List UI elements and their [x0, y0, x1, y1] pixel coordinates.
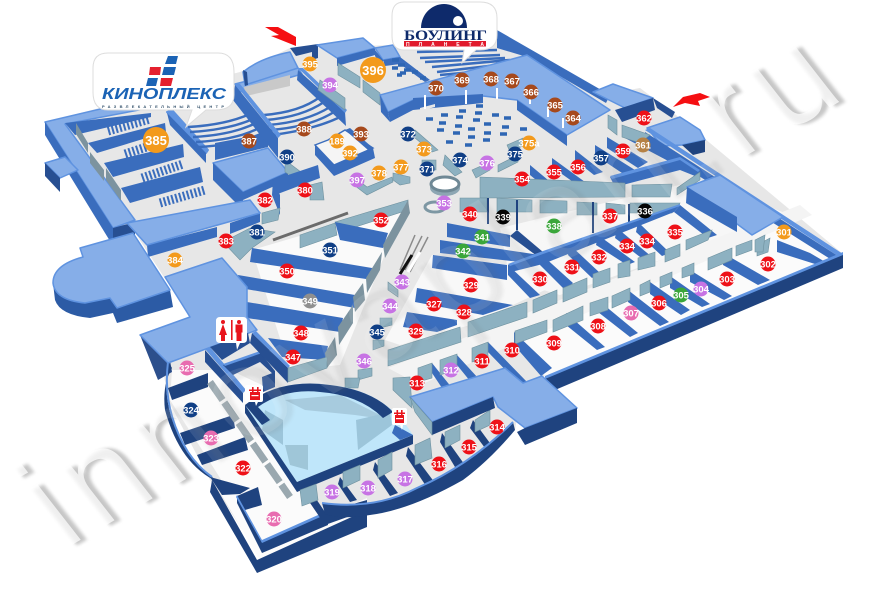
marker 334: 334 [619, 242, 636, 252]
south walls [210, 480, 367, 573]
cinema halls: seat banks [65, 113, 205, 203]
marker 385: 385 [145, 133, 167, 148]
marker 336: 336 [637, 206, 653, 218]
marker 393: 393 [353, 130, 369, 140]
marker 374: 374 [452, 156, 469, 166]
glass shopfronts, top band [460, 172, 700, 233]
marker 338: 338 [546, 222, 562, 232]
marker 343: 343 [394, 278, 410, 288]
marker 316: 316 [431, 460, 447, 470]
glass kiosks near top-right [608, 115, 617, 135]
marker 305: 305 [673, 290, 690, 302]
icon: man [236, 320, 242, 341]
callout: Kinoplex [93, 53, 234, 127]
Kinoplex name: КИНОПЛЕКС [102, 86, 227, 103]
right roof block [686, 175, 783, 235]
store floors, right [514, 222, 840, 376]
marker 329: 329 [408, 326, 424, 338]
marker 364: 364 [565, 114, 582, 124]
marker 308: 308 [590, 322, 606, 332]
cinema divider wall [167, 110, 208, 163]
left triangle glass [223, 200, 408, 260]
marker 340: 340 [462, 210, 478, 220]
marker 377: 377 [393, 162, 409, 174]
marker 395: 395 [302, 60, 319, 70]
bowling lanes [417, 50, 518, 75]
corridor [388, 205, 812, 385]
marker 350: 350 [279, 266, 295, 278]
marker 351: 351 [322, 246, 339, 256]
marker 355: 355 [546, 168, 563, 178]
marker 349: 349 [302, 296, 318, 308]
marker 361: 361 [635, 140, 652, 152]
marker 365: 365 [547, 100, 564, 112]
floor base [45, 32, 843, 560]
marker 310: 310 [504, 346, 520, 356]
centre roof block [213, 148, 305, 210]
marker 302: 302 [760, 260, 776, 270]
marker 369: 369 [454, 76, 470, 86]
central corridor kiosks [345, 282, 398, 388]
lower store dividing walls [514, 253, 770, 376]
central escalators [400, 235, 428, 274]
marker 320: 320 [266, 514, 282, 526]
room 392 enclosure [315, 128, 375, 176]
room 380 walls [262, 165, 324, 224]
south arc wall [322, 422, 515, 517]
outer right wall [545, 252, 843, 390]
marker 331: 331 [564, 262, 581, 274]
room 394 glass [318, 80, 345, 110]
arrow: left entrance [265, 27, 296, 46]
marker 322: 322 [235, 464, 251, 474]
toilet block walls [205, 331, 327, 403]
bowling roof [380, 30, 610, 146]
arrow: right entrance [673, 93, 710, 107]
markers [143, 56, 793, 526]
marker 327: 327 [426, 300, 442, 310]
marker 328: 328 [456, 308, 472, 318]
right room edge [755, 235, 765, 252]
marker 372: 372 [400, 130, 416, 140]
marker 366: 366 [523, 88, 539, 98]
marker 385 [143, 127, 169, 153]
Kinoplex subtitle: РАЗВЛЕКАТЕЛЬНЫЙ ЦЕНТР [102, 104, 224, 109]
marker 362: 362 [636, 114, 652, 124]
watermark shadow: innovaplan.ru [0, 3, 865, 573]
marker 390: 390 [279, 152, 295, 164]
back arched roof [243, 38, 430, 86]
marker 357: 357 [593, 154, 609, 164]
hall blocks [215, 133, 268, 160]
marker 384: 384 [167, 256, 184, 266]
marker 352: 352 [373, 216, 389, 226]
marker 339: 339 [495, 212, 511, 224]
marker 319: 319 [324, 488, 340, 498]
watermark shadow: innovaplan.ru [0, 3, 871, 573]
glass near 396 [338, 63, 380, 105]
lobby roof [140, 258, 257, 380]
callout: fire escape 2 [392, 408, 407, 430]
marker 388: 388 [296, 124, 312, 136]
marker 332: 332 [591, 252, 607, 264]
marker 348: 348 [293, 328, 309, 340]
callout: toilets [216, 317, 247, 350]
marker 324: 324 [183, 406, 200, 416]
marker 335: 335 [667, 228, 684, 238]
top-right arched roof [593, 84, 705, 155]
pool [245, 384, 413, 492]
marker 356: 356 [570, 162, 586, 174]
marker 317: 317 [397, 474, 413, 486]
south white corridor [214, 482, 367, 560]
marker 375а: 375а [518, 138, 540, 150]
cross roof [127, 200, 260, 257]
marker 307: 307 [623, 308, 639, 320]
upper store walls [403, 204, 717, 332]
watermark overlay: innovaplan.ru [0, 3, 865, 573]
marker 346: 346 [356, 356, 372, 368]
marker 359: 359 [615, 146, 631, 158]
cinema roof frame [45, 88, 192, 246]
hall 3 wall [297, 68, 347, 126]
marker 396 [360, 57, 386, 83]
round wing inner walls [168, 373, 262, 510]
marker 313: 313 [409, 378, 425, 390]
marker 314: 314 [489, 422, 506, 434]
callout: Bowling [392, 2, 497, 63]
marker 337: 337 [602, 212, 618, 222]
marker 309: 309 [546, 338, 562, 350]
bowling red strip: ПЛАНЕТА [406, 42, 484, 48]
hall 2 seating [188, 97, 338, 147]
marker 392: 392 [342, 148, 358, 160]
left triangle store walls [238, 222, 388, 360]
upper-mid glass [393, 342, 488, 408]
annex semicircle [53, 233, 173, 323]
marker 334: 334 [639, 236, 656, 248]
marker 323: 323 [203, 434, 219, 444]
bowling tables [392, 60, 426, 78]
divider [231, 320, 233, 340]
marker 394: 394 [322, 80, 339, 92]
marker 373: 373 [416, 144, 432, 156]
marker 353: 353 [436, 198, 452, 210]
right upper wall [645, 128, 843, 262]
marker 382: 382 [257, 196, 273, 206]
room 302 wall [757, 238, 827, 264]
marker 381: 381 [249, 228, 266, 238]
marker 380: 380 [297, 186, 313, 196]
watermark overlay: innovaplan.ru [0, 3, 871, 573]
marker 189: 189 [329, 136, 345, 148]
marker 345: 345 [369, 328, 386, 338]
south stores walls [338, 420, 495, 502]
marker 303: 303 [719, 274, 735, 286]
top stores: walls [530, 128, 700, 187]
round wing outer wall [164, 362, 218, 482]
marker 397: 397 [349, 176, 365, 186]
marker 375: 375 [507, 150, 524, 160]
marker 370: 370 [428, 84, 444, 94]
south stores glass [300, 410, 490, 506]
atrium small ring [425, 202, 445, 212]
marker 311: 311 [474, 356, 490, 368]
atrium ring [430, 177, 460, 196]
marker 354: 354 [514, 174, 531, 186]
marker 383: 383 [218, 236, 234, 248]
bowling name: БОУЛИНГ [404, 28, 487, 44]
marker 312: 312 [443, 366, 459, 376]
marker 367: 367 [504, 76, 520, 88]
callout: fire escape 1 [245, 385, 263, 406]
lower central roof [410, 368, 577, 445]
marker 344: 344 [382, 302, 399, 312]
marker 376: 376 [479, 158, 495, 170]
upper-mid store walls [432, 342, 527, 391]
marker 396: 396 [362, 63, 384, 78]
marker 371: 371 [419, 164, 436, 176]
marker 318: 318 [360, 484, 376, 494]
escalator [273, 213, 348, 240]
food court tables [426, 106, 527, 145]
marker 378: 378 [371, 168, 387, 180]
upper row glass fronts [388, 230, 712, 366]
marker 325: 325 [179, 364, 196, 374]
wing shop glass [210, 382, 290, 497]
atrium kiosks [350, 130, 525, 195]
marker 347: 347 [285, 352, 301, 364]
marker 301: 301 [776, 228, 793, 238]
marker 342: 342 [455, 246, 471, 258]
lower glass fronts [515, 240, 752, 344]
marker 315: 315 [461, 442, 478, 454]
marker 387: 387 [241, 136, 257, 148]
hall 2 top wall [233, 68, 302, 158]
marker 306: 306 [651, 298, 667, 310]
marker 368: 368 [483, 74, 499, 86]
marker 304: 304 [693, 284, 710, 296]
Kinoplex logo squares [146, 56, 178, 86]
left triangle right glass panels [325, 200, 410, 368]
marker 330: 330 [532, 274, 548, 286]
icon: woman [219, 320, 227, 341]
marker 329: 329 [463, 280, 479, 292]
bowling dome [421, 4, 467, 28]
marker 341: 341 [474, 232, 491, 244]
